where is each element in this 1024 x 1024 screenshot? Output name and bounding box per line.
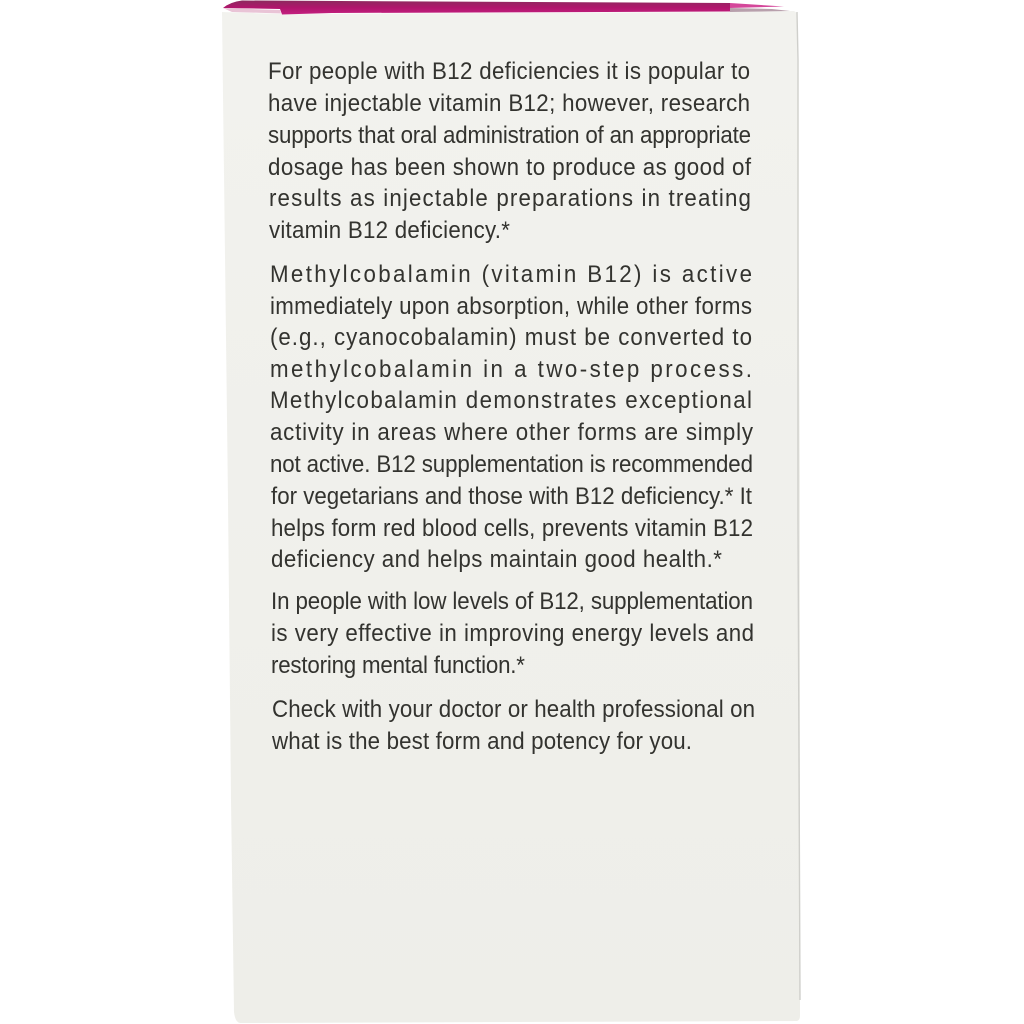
paragraph 1: dosage has been shown to produce as good of	[268, 153, 752, 180]
paragraph 1: have injectable vitamin B12; however, research	[268, 89, 750, 116]
paragraph 2: deficiency and helps maintain good health.*	[271, 545, 722, 572]
paragraph 2: Methylcobalamin demonstrates exceptional	[270, 386, 752, 413]
paragraph 2: Methylcobalamin (vitamin B12) is active	[270, 260, 752, 287]
paragraph 2: helps form red blood cells, prevents vitamin B12	[271, 514, 753, 541]
paragraph 2: immediately upon absorption, while other forms	[270, 292, 752, 319]
paragraph 3	[271, 587, 754, 678]
box top flap: magenta edge	[223, 0, 790, 14]
paragraph 1	[268, 57, 752, 243]
paragraph 4: what is the best form and potency for you.	[271, 727, 692, 754]
paragraph 2	[270, 260, 753, 572]
paragraph 3: In people with low levels of B12, supplementation	[271, 587, 753, 614]
paragraph 2: activity in areas where other forms are simply	[270, 418, 753, 445]
paragraph 2: for vegetarians and those with B12 deficiency.* It	[271, 482, 753, 509]
paragraph 1: results as injectable preparations in treating	[269, 184, 751, 211]
paragraph 4	[271, 695, 755, 754]
body text	[268, 57, 755, 754]
paragraph 2: methylcobalamin in a two-step process.	[270, 355, 752, 382]
paragraph 2: (e.g., cyanocobalamin) must be converted to	[270, 323, 752, 350]
panel right edge shadow	[797, 12, 800, 1000]
paragraph 3: is very effective in improving energy levels and	[271, 619, 754, 646]
paragraph 1: vitamin B12 deficiency.*	[269, 216, 510, 243]
paragraph 1: For people with B12 deficiencies it is popular to	[268, 57, 750, 84]
paragraph 3: restoring mental function.*	[271, 651, 525, 678]
paragraph 1: supports that oral administration of an appropriate	[268, 121, 751, 148]
paragraph 4: Check with your doctor or health professional on	[272, 695, 755, 722]
paragraph 2: not active. B12 supplementation is recommended	[270, 450, 753, 477]
box side panel	[222, 11, 800, 1023]
